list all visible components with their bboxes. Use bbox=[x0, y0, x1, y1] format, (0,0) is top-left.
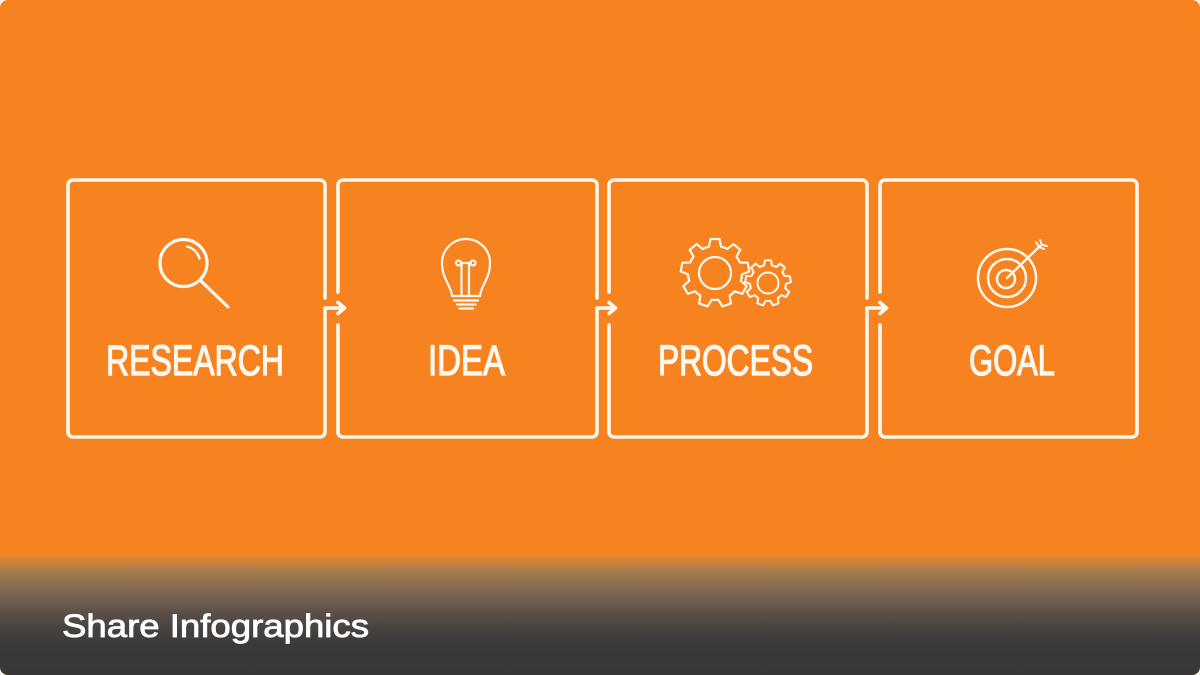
icon: large gear bbox=[680, 239, 750, 308]
panel: research step bbox=[68, 180, 344, 437]
panel: goal step bbox=[880, 180, 1137, 437]
panel: process step bbox=[609, 180, 886, 437]
icon: target with arrow bbox=[978, 240, 1047, 307]
footer title: Share Infographics bbox=[62, 608, 369, 644]
icon: light bulb bbox=[442, 239, 490, 308]
icon: small gear bbox=[745, 260, 791, 306]
research box outline bbox=[68, 180, 344, 437]
panel: idea step bbox=[338, 180, 616, 437]
arrow: process to goal bbox=[880, 302, 886, 314]
heading: research: RESEARCH bbox=[106, 337, 284, 385]
arrow: idea to process bbox=[609, 302, 616, 314]
heading: goal: GOAL bbox=[969, 337, 1055, 385]
process box outline bbox=[609, 180, 886, 437]
heading: idea: IDEA bbox=[428, 337, 505, 385]
idea box outline bbox=[338, 180, 615, 437]
heading: process: PROCESS bbox=[658, 337, 813, 385]
bottom dark gradient band bbox=[0, 550, 1200, 675]
arrow: research to idea bbox=[338, 302, 344, 314]
goal box outline bbox=[880, 180, 1137, 437]
icon: magnifying glass bbox=[160, 240, 228, 307]
